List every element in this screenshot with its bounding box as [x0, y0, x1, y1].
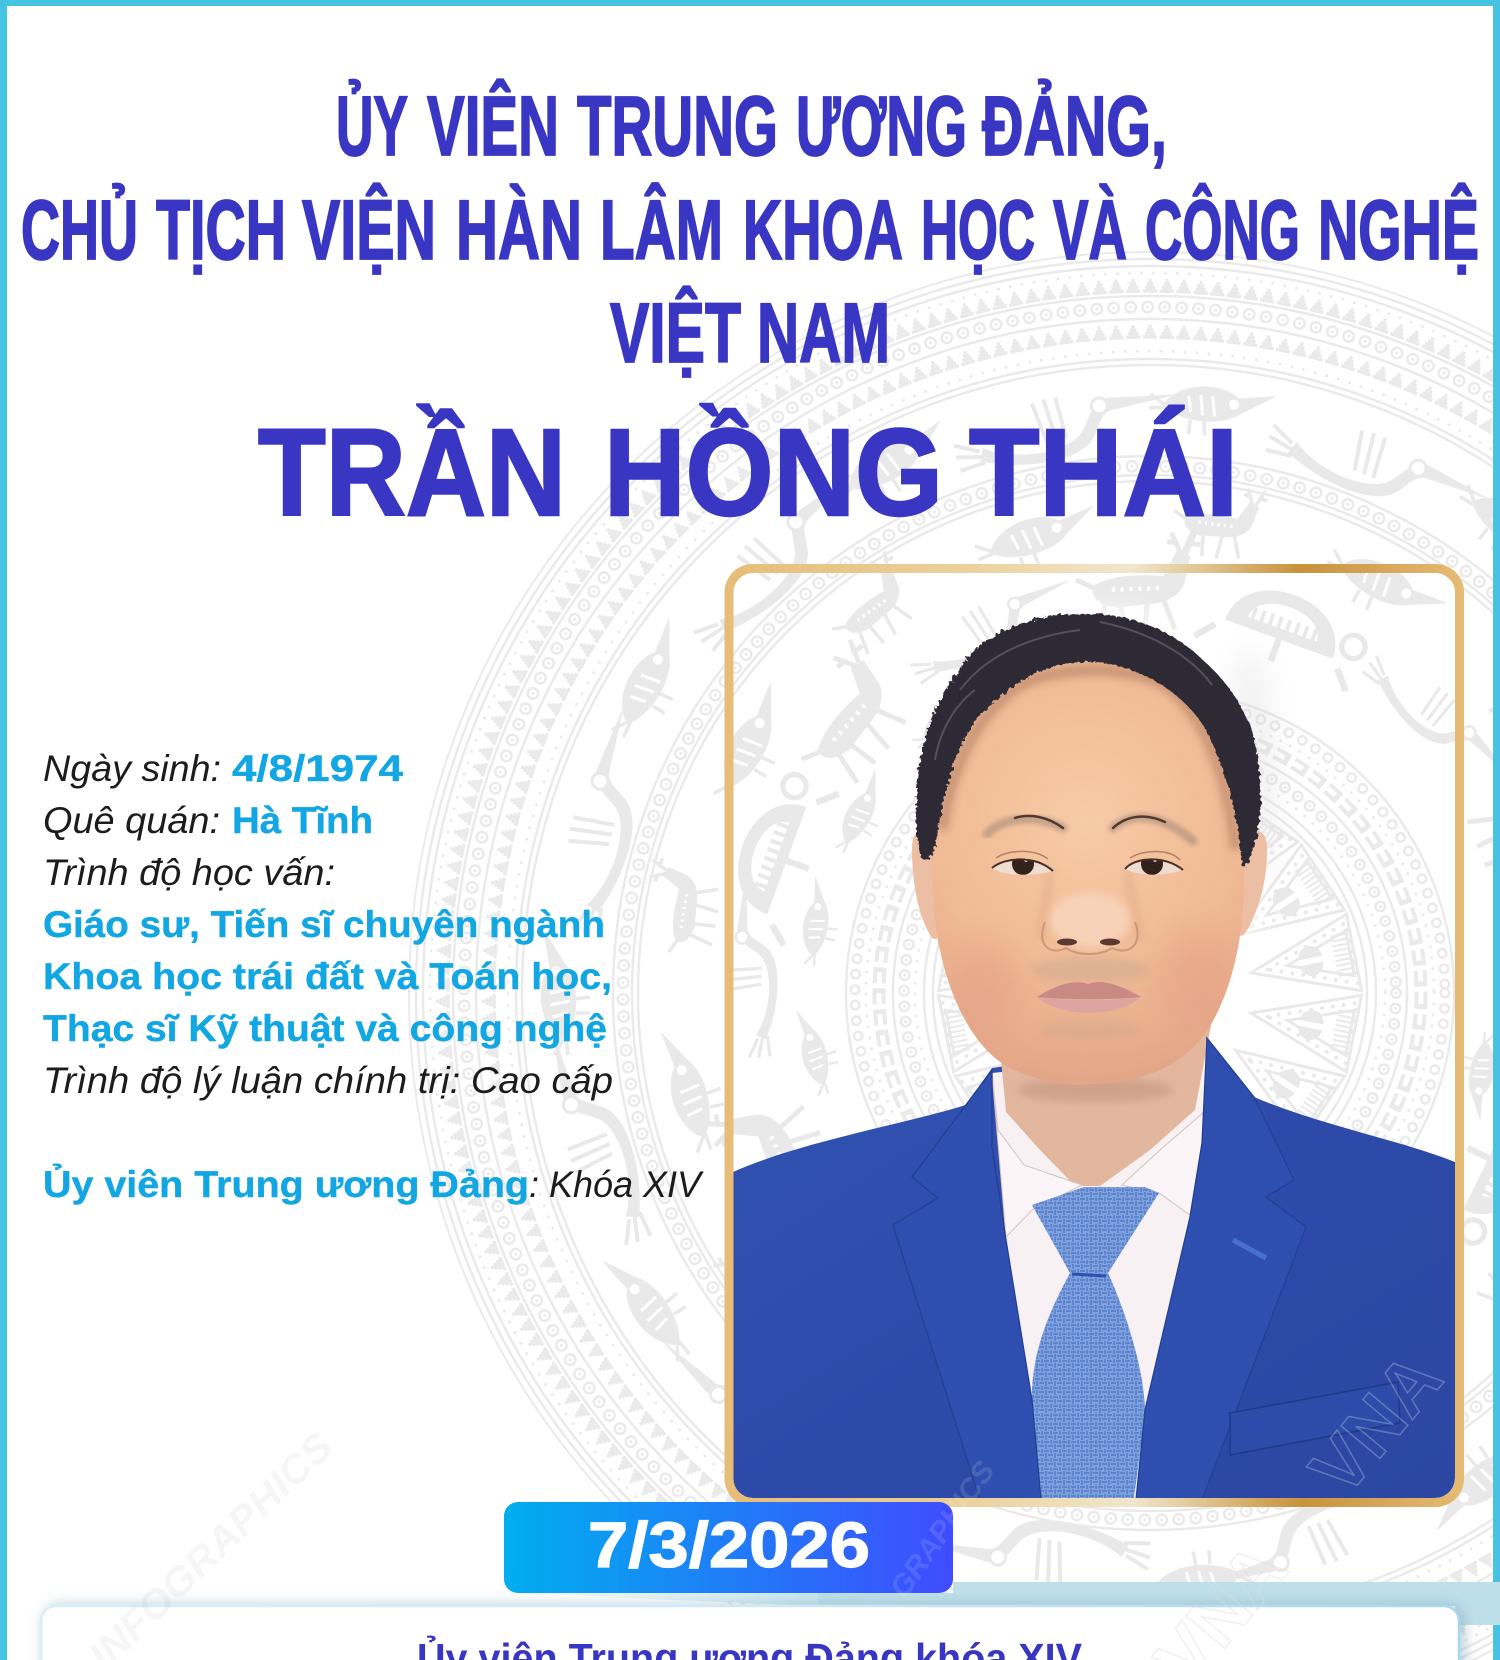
date of birth: Ngày sinh:	[43, 748, 221, 789]
tie	[1032, 1187, 1159, 1498]
person name: THÁI	[969, 405, 1238, 542]
soft halo behind head	[1101, 610, 1251, 936]
date of birth	[43, 748, 403, 789]
bronze drum background pattern	[409, 252, 1500, 1660]
nose shadow sides	[1040, 874, 1139, 931]
title line 2	[21, 183, 1479, 277]
left eye	[992, 851, 1053, 875]
title line 1: ƯƠNG	[796, 79, 967, 173]
title line 2: CHỦ	[21, 183, 138, 277]
title line 2: KHOA	[743, 183, 903, 277]
grey hair strands	[935, 622, 1212, 760]
mouth	[1037, 982, 1141, 1013]
face	[932, 650, 1244, 1084]
person name: HỒNG	[604, 405, 943, 542]
title line 1: VIÊN	[427, 79, 559, 173]
chin stubble	[1050, 1024, 1130, 1036]
face shading	[942, 670, 1236, 1040]
gold photo frame	[729, 568, 1460, 1502]
title line 2: TỊCH	[156, 183, 286, 277]
date badge	[504, 1455, 1002, 1604]
title line 3: NAM	[757, 286, 890, 380]
drum animal band	[637, 479, 1500, 1507]
central committee term: Ủy viên Trung ương Đảng	[43, 1163, 529, 1205]
tie knot line	[1072, 1274, 1106, 1276]
education detail: Thạc sĩ Kỹ thuật và công nghệ	[43, 1008, 607, 1049]
hairline shadow	[942, 670, 1236, 850]
title line 1: ỦY	[336, 79, 408, 173]
person name: TRẦN	[258, 405, 566, 542]
political theory level: Trình độ lý luận chính trị: Cao cấp	[43, 1060, 613, 1101]
upper lip stubble	[1030, 957, 1150, 983]
right eye	[1125, 851, 1183, 875]
date text: 7/3/2026	[588, 1509, 870, 1581]
eyebrows	[987, 816, 1193, 841]
person name	[258, 405, 1238, 542]
cheeks	[963, 936, 1218, 1009]
drum middle chain ring	[613, 456, 1500, 1530]
title line 3: VIỆT	[610, 286, 741, 380]
title line 1: TRUNG	[577, 79, 778, 173]
hometown: Quê quán:	[43, 800, 220, 841]
portrait photo	[733, 610, 1458, 1510]
suit	[733, 1038, 1455, 1500]
title	[21, 79, 1479, 542]
title line 2: HÀN	[456, 183, 582, 277]
drum outer rings	[409, 252, 1500, 1660]
shirt	[992, 1050, 1211, 1498]
date of birth: 4/8/1974	[232, 748, 403, 789]
breast pocket	[1230, 1382, 1400, 1455]
bottom content panel	[41, 1527, 1459, 1660]
badge watermark: GRAPHICS	[884, 1455, 1002, 1604]
education detail: Khoa học trái đất và Toán học,	[43, 956, 612, 997]
education detail	[43, 904, 612, 1049]
title line 3	[610, 286, 890, 380]
title line 2: LÂM	[600, 183, 723, 277]
central committee term: : Khóa XIV	[529, 1164, 704, 1205]
hair	[916, 614, 1261, 866]
light blue ribbon behind panel	[507, 1582, 1500, 1625]
shirt collar	[992, 1074, 1203, 1238]
title line 2: VÀ	[1053, 183, 1127, 277]
head shadow	[1235, 669, 1272, 840]
right lapel	[1136, 1038, 1306, 1500]
ears	[912, 830, 1267, 939]
left lapel	[893, 1070, 1041, 1500]
biography text block	[43, 748, 704, 1205]
neck	[998, 1020, 1212, 1186]
chin shadow	[1017, 1078, 1173, 1102]
title line 2: HỌC	[921, 183, 1035, 277]
title line 2: CÔNG	[1145, 183, 1300, 277]
hometown	[43, 800, 373, 841]
VNA watermark on photo: VNA	[1294, 1337, 1458, 1510]
buttonhole	[1233, 1240, 1266, 1258]
nose	[1042, 892, 1138, 954]
drum star wedges	[938, 781, 1362, 1205]
title line 1	[336, 79, 1167, 173]
badge background	[504, 1502, 953, 1593]
central committee term	[43, 1163, 704, 1205]
education label: Trình độ học vấn:	[43, 852, 335, 893]
hometown: Hà Tĩnh	[232, 800, 373, 841]
title line 1: ĐẢNG,	[982, 79, 1167, 173]
drum bird band	[536, 377, 1500, 1605]
panel card	[41, 1606, 1459, 1660]
title line 2: VIỆN	[302, 183, 436, 277]
education detail: Giáo sư, Tiến sĩ chuyên ngành	[43, 904, 605, 945]
drum inner rings	[846, 689, 1454, 1297]
